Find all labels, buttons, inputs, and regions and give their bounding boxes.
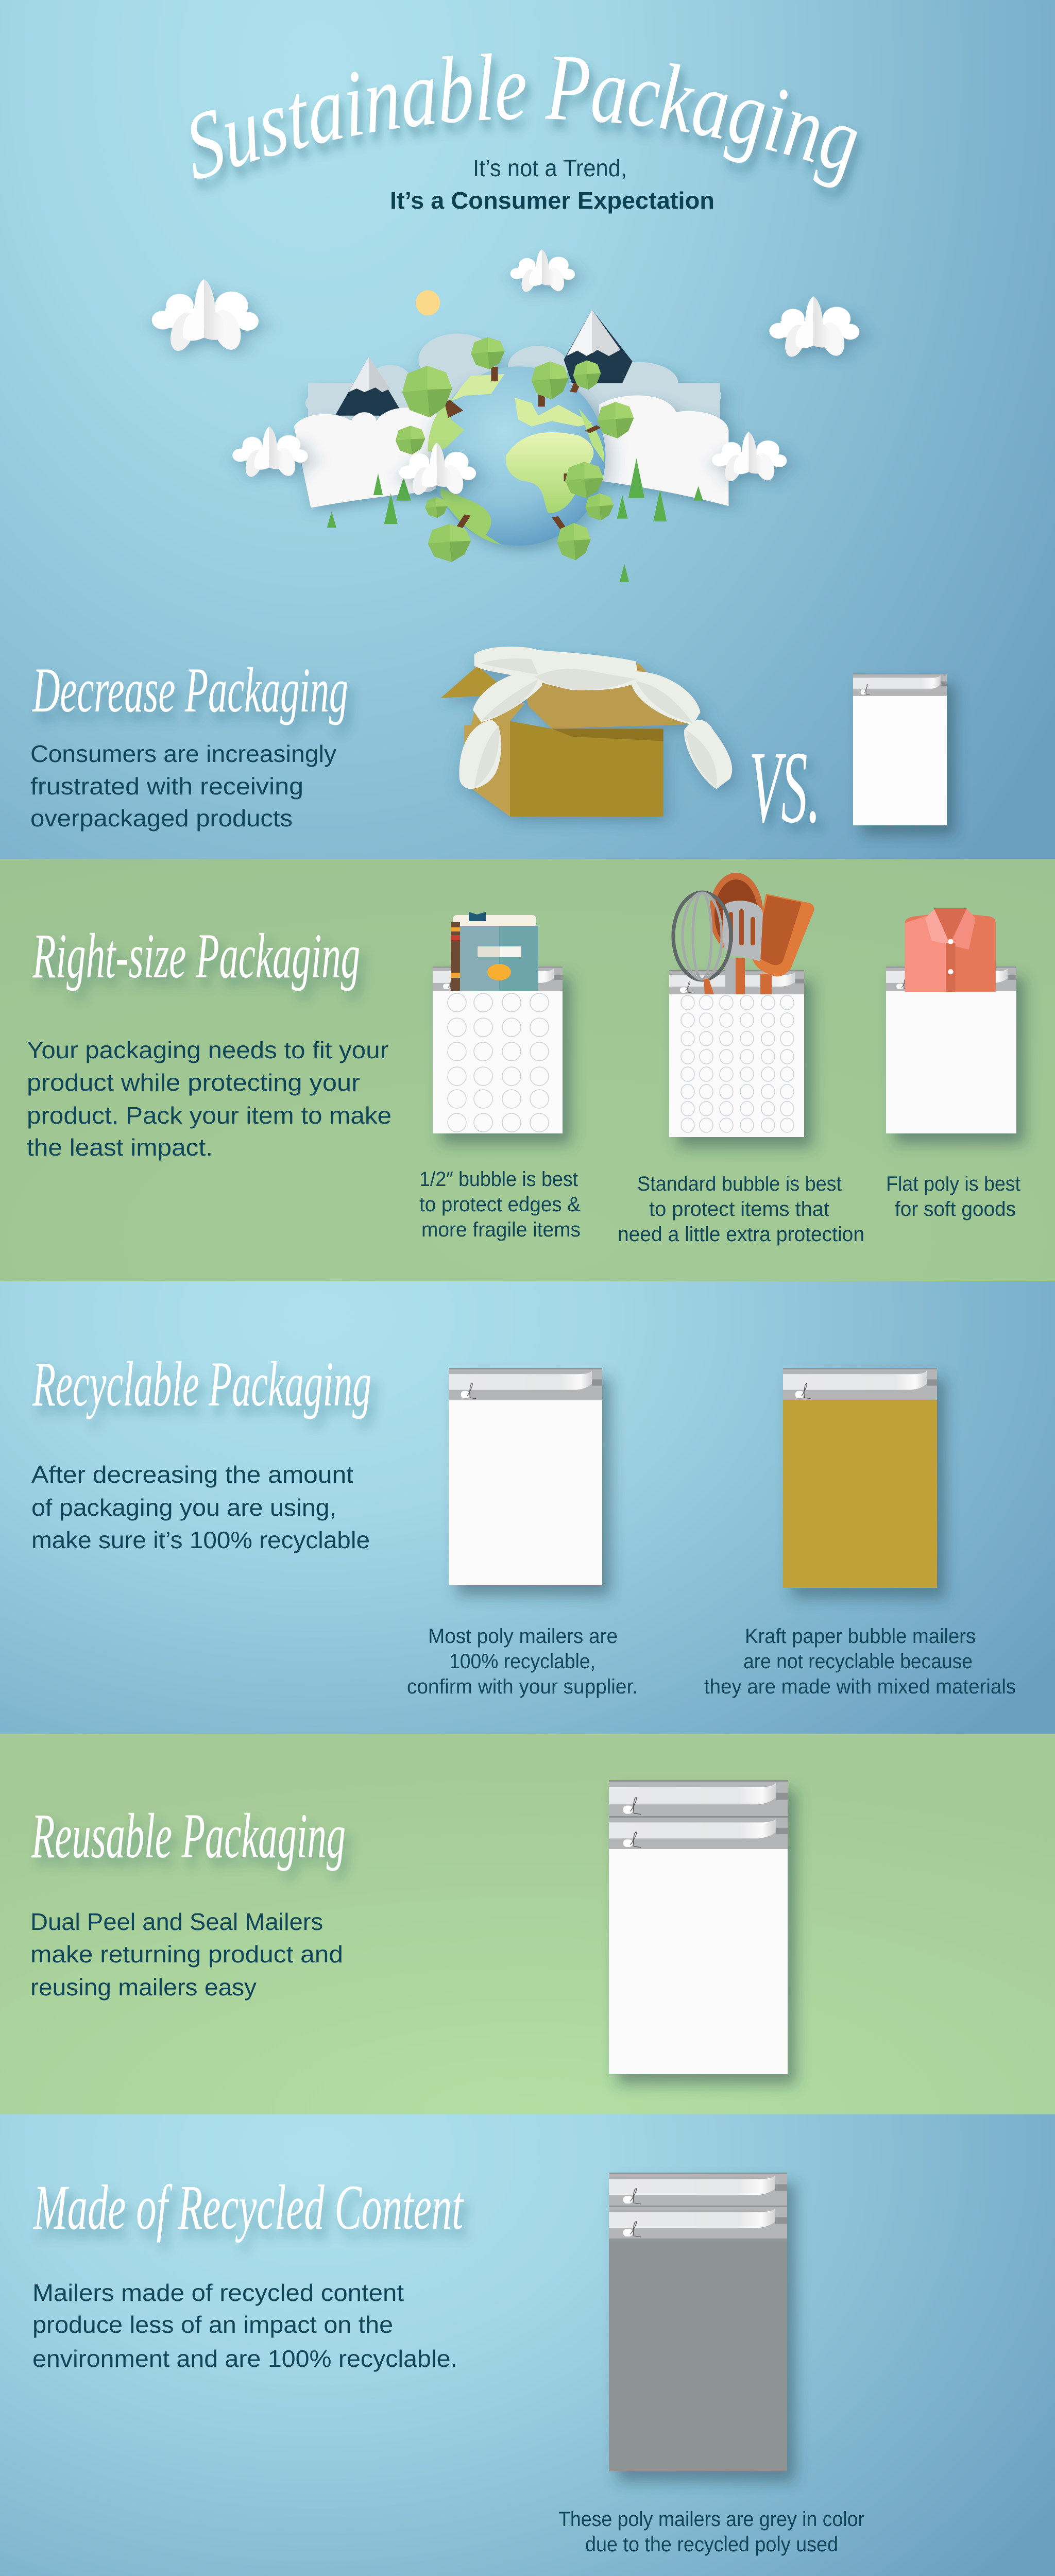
- caption: kraft mailers: they are made with mixed materials: [704, 1675, 1016, 1698]
- illustration: paper earth with clouds and trees: [152, 249, 859, 582]
- subtitle: It’s not a Trend,: [473, 155, 627, 181]
- icon: flat poly mailer: [886, 967, 1016, 1133]
- caption: kraft mailers: Kraft paper bubble mailers: [745, 1625, 976, 1648]
- icon: book: [451, 912, 538, 991]
- icon: grey recycled mailer: [609, 2173, 787, 2471]
- back paper clouds: [305, 333, 721, 437]
- icon: left mountain: [335, 357, 404, 416]
- icon: overpacked cardboard box: [440, 647, 732, 817]
- text: reusable packaging: make returning product and: [30, 1941, 343, 1968]
- text: right-size packaging: Your packaging needs to fit your: [27, 1037, 388, 1063]
- text: recyclable packaging: [31, 1461, 370, 1553]
- caption: grey mailers: [558, 2508, 864, 2556]
- subtitle: [390, 155, 714, 214]
- icon: dual peel mailer: [609, 1780, 788, 2074]
- caption: flat poly: [886, 1173, 1020, 1221]
- icon: half-inch bubble mailer: [433, 967, 563, 1133]
- caption: standard bubble: Standard bubble is best: [637, 1173, 842, 1195]
- front paper clouds: [294, 396, 728, 508]
- caption: grey mailers: These poly mailers are grey in color: [558, 2508, 864, 2531]
- icon: sun: [416, 290, 440, 315]
- text: right-size packaging: [27, 1037, 392, 1161]
- caption: half-inch bubble: 1/2″ bubble is best: [419, 1168, 578, 1191]
- heading: Reusable Packaging: Reusable Packaging: [31, 1801, 346, 1871]
- caption: poly mailers: [407, 1625, 638, 1698]
- icon: poly mailer: [853, 673, 947, 825]
- caption: half-inch bubble: [419, 1168, 581, 1241]
- panel: right-size packaging: [0, 859, 1055, 1281]
- text: decrease packaging: overpackaged products: [30, 805, 293, 832]
- heading: Decrease Packaging: Decrease Packaging: [32, 655, 348, 725]
- caption: kraft mailers: [704, 1625, 1016, 1698]
- caption: flat poly: Flat poly is best: [886, 1173, 1020, 1195]
- panel: made of recycled content: [0, 2114, 1055, 2576]
- text: recyclable packaging: After decreasing the amount: [31, 1461, 353, 1488]
- caption: poly mailers: 100% recyclable,: [449, 1650, 595, 1673]
- caption: poly mailers: confirm with your supplier.: [407, 1675, 638, 1698]
- icon: right mountain: [564, 310, 633, 383]
- icon: globe: [428, 366, 605, 546]
- heading: Recyclable Packaging: Recyclable Packaging: [32, 1349, 371, 1419]
- icon: white poly mailer: [449, 1368, 602, 1585]
- text: recycled content: produce less of an impact on the: [32, 2311, 393, 2338]
- caption: standard bubble: [618, 1173, 864, 1246]
- caption: half-inch bubble: more fragile items: [421, 1218, 581, 1241]
- icon: shirt: [905, 908, 996, 992]
- icon: standard bubble mailer: [669, 970, 804, 1137]
- icon: paper clouds: [152, 249, 859, 496]
- text: reusable packaging: reusing mailers easy: [30, 1974, 257, 2001]
- text: decrease packaging: [30, 740, 336, 832]
- panel: recyclable packaging: [0, 1281, 1055, 1734]
- text: recycled content: [32, 2279, 457, 2372]
- caption: standard bubble: to protect items that: [649, 1198, 829, 1221]
- text: right-size packaging: the least impact.: [27, 1134, 213, 1161]
- text: recycled content: Mailers made of recycled content: [32, 2279, 404, 2306]
- text: decrease packaging: frustrated with receiving: [30, 773, 303, 800]
- panel: hero: [0, 0, 1055, 859]
- subtitle: It’s a Consumer Expectation: [390, 187, 714, 214]
- text: VS: VS.: [749, 731, 821, 844]
- caption: kraft mailers: are not recyclable because: [743, 1650, 973, 1673]
- icon: kitchen utensils: [673, 873, 814, 994]
- text: recyclable packaging: of packaging you are using,: [31, 1494, 336, 1521]
- caption: poly mailers: Most poly mailers are: [428, 1625, 618, 1648]
- title: Sustainable Packaging: [191, 54, 863, 200]
- text: decrease packaging: Consumers are increasingly: [30, 740, 336, 767]
- text: reusable packaging: [30, 1908, 343, 2001]
- icon: pine trees: [327, 459, 703, 582]
- text: recyclable packaging: make sure it’s 100% recyclable: [31, 1527, 370, 1553]
- text: reusable packaging: Dual Peel and Seal Mailers: [30, 1908, 323, 1935]
- icon: trees: [396, 337, 634, 562]
- heading: Made of Recycled Content: Made of Recycled Content: [33, 2172, 464, 2243]
- caption: half-inch bubble: to protect edges &: [419, 1193, 581, 1216]
- text: right-size packaging: product while protecting your: [27, 1069, 360, 1096]
- panel: reusable packaging: [0, 1734, 1055, 2114]
- text: recycled content: environment and are 100% recyclable.: [32, 2345, 457, 2372]
- heading: Right-size Packaging: Right-size Packaging: [32, 921, 360, 991]
- icon: kraft bubble mailer: [783, 1368, 937, 1588]
- caption: grey mailers: due to the recycled poly used: [585, 2533, 838, 2556]
- caption: standard bubble: need a little extra protection: [618, 1223, 864, 1246]
- text: right-size packaging: product. Pack your item to make: [27, 1102, 392, 1129]
- caption: flat poly: for soft goods: [895, 1198, 1016, 1221]
